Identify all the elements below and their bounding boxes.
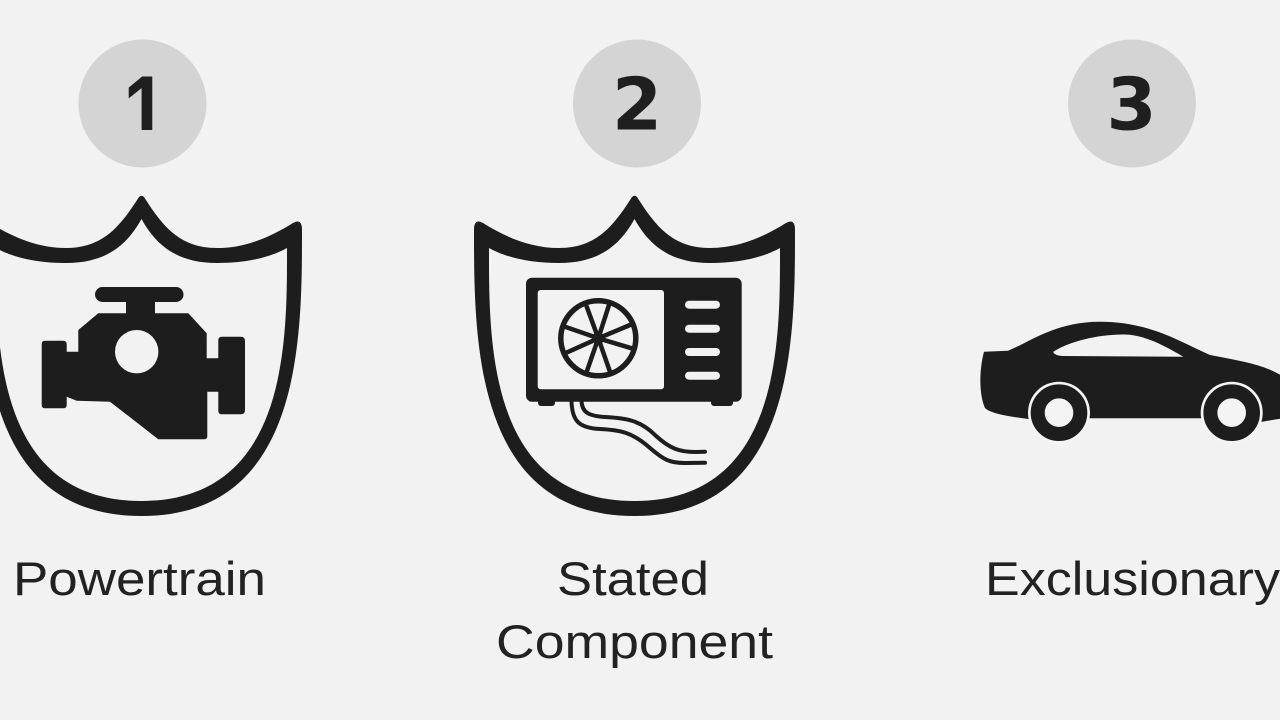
icon: cables <box>572 401 705 463</box>
number badge 1 <box>78 40 206 168</box>
number badge 2 <box>573 40 701 168</box>
icon: shield outline <box>0 196 302 516</box>
label: Stated Component <box>496 552 773 668</box>
label: Stated Component: Stated <box>557 552 709 605</box>
number badge 3 <box>1068 40 1196 168</box>
label: Powertrain: Powertrain <box>13 552 266 605</box>
number badge 3: 3 <box>1106 62 1157 146</box>
icon: engine <box>42 287 245 439</box>
icon: car <box>980 322 1280 444</box>
number badge 2: 2 <box>612 62 662 146</box>
number badge 1: 1 <box>123 55 167 166</box>
panel: stated component <box>474 40 795 668</box>
label: Stated Component: Component <box>496 615 773 668</box>
label: Exclusionary: Exclusionary <box>985 552 1280 605</box>
panel: exclusionary <box>980 40 1280 605</box>
icon: shield outline <box>474 196 795 516</box>
icon: air conditioning unit <box>526 278 742 463</box>
panel: powertrain <box>0 40 302 605</box>
